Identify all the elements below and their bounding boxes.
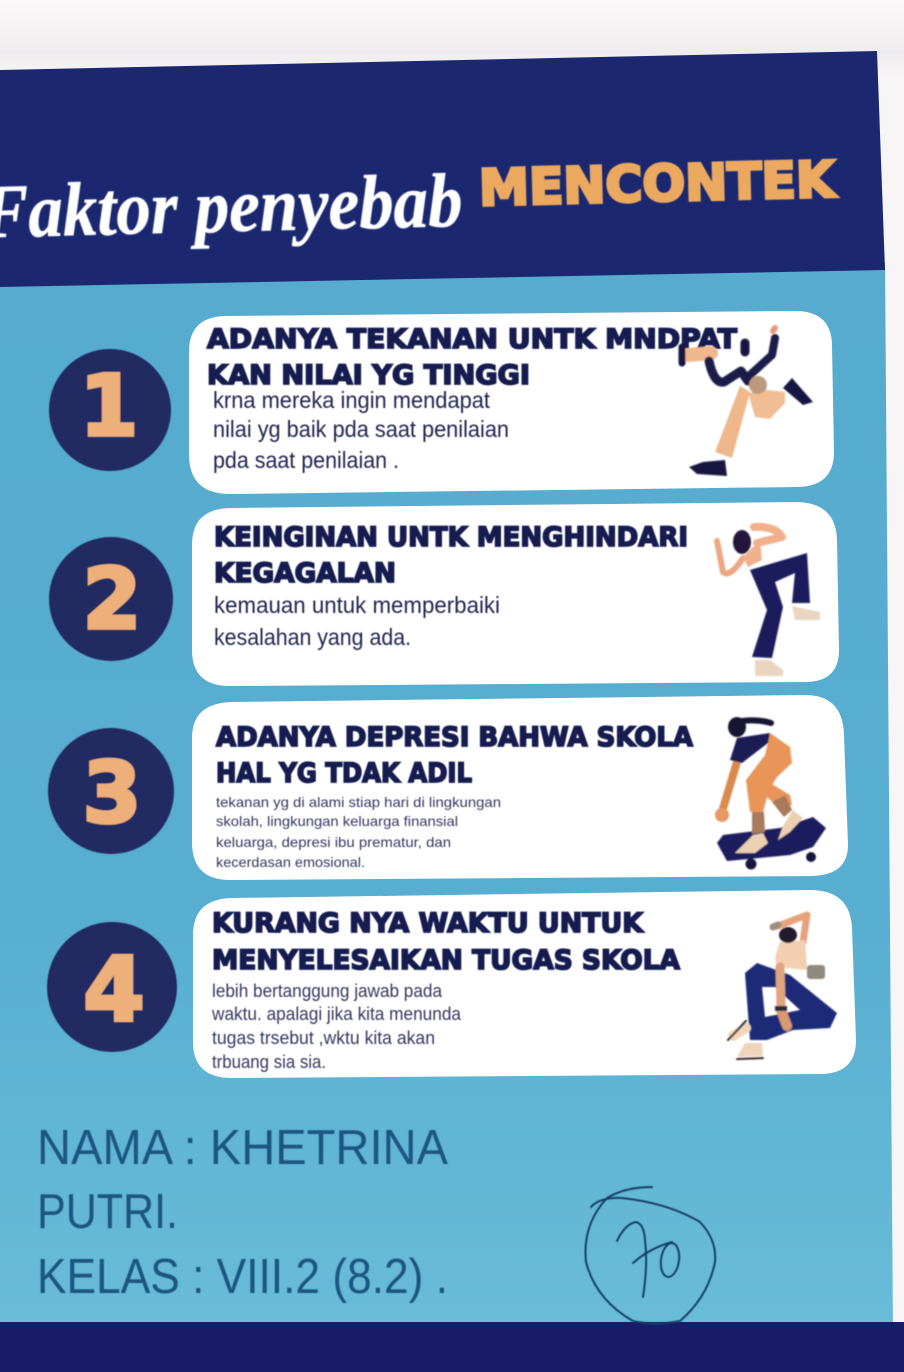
top navy banner [0, 51, 885, 287]
title highlight: MENCONTEK: MENCONTEK [478, 151, 838, 217]
title [0, 150, 838, 254]
icon: figure seated [728, 915, 837, 1059]
card 3 heading: ADANYA DEPRESI BAHWA SKOLA [216, 722, 693, 753]
panel: factor 3 [192, 695, 848, 880]
card 1 heading: ADANYA TEKANAN UNTK MNDPAT [207, 324, 738, 355]
card 3 background [192, 695, 848, 880]
card 4 body text [211, 981, 462, 1072]
card 1 body text [213, 387, 509, 473]
number badge 1 [49, 349, 171, 471]
number badge 4: 4 [83, 938, 145, 1041]
card 1 body text: krna mereka ingin mendapat [213, 387, 491, 413]
card 4 body text: waktu. apalagi jika kita menunda [211, 1004, 462, 1024]
card 4 heading: MENYELESAIKAN TUGAS SKOLA [212, 945, 680, 976]
number badge 2: 2 [83, 550, 141, 648]
card 3 body text: tekanan yg di alami stiap hari di lingkungan [216, 794, 501, 810]
card 2 background [192, 502, 839, 686]
card 4 body text: trbuang sia sia. [212, 1052, 326, 1072]
student name and class: PUTRI. [37, 1185, 178, 1239]
paper shading above banner [0, 0, 904, 75]
card 3 body text: skolah, lingkungan keluarga finansial [216, 813, 458, 829]
card 1 body text: pda saat penilaian . [213, 447, 399, 473]
card 2 heading: KEGAGALAN [214, 558, 396, 589]
panel: factor 4 [193, 890, 856, 1078]
number badge 2 [49, 537, 173, 661]
card 2 body text: kesalahan yang ada. [214, 624, 411, 650]
card 4 heading [212, 908, 680, 976]
card 4 body text: tugas trsebut ,wktu kita akan [212, 1028, 435, 1048]
card 3 heading: HAL YG TDAK ADIL [216, 758, 472, 789]
card 4 body text: lebih bertanggung jawab pada [212, 981, 443, 1001]
card 2 body text: kemauan untuk memperbaiki [214, 592, 500, 618]
card 2 body text [214, 592, 500, 650]
number badge 4 [47, 922, 177, 1052]
card 1 body text: nilai yg baik pda saat penilaian [213, 416, 509, 442]
panel: factor 1 [189, 311, 834, 494]
number badge 1: 1 [80, 357, 138, 455]
bottom navy band [0, 1322, 904, 1372]
card 2 heading: KEINGINAN UNTK MENGHINDARI [214, 522, 688, 553]
card 4 heading: KURANG NYA WAKTU UNTUK [212, 908, 644, 939]
card 2 heading [214, 522, 688, 589]
card 3 body text: kecerdasan emosional. [216, 854, 365, 870]
student name and class: NAMA : KHETRINA [37, 1121, 448, 1175]
student name and class [37, 1121, 448, 1304]
card 3 body text [216, 794, 501, 870]
icon: figure jumping [682, 328, 813, 476]
card 1 heading [207, 324, 738, 391]
number badge 3 [48, 728, 174, 854]
blue poster panel [0, 262, 893, 1330]
number badge 3: 3 [83, 744, 141, 842]
student name and class: KELAS : VIII.2 (8.2) . [37, 1250, 448, 1304]
card 3 heading [216, 722, 693, 789]
handwritten grade: 70 [585, 1187, 715, 1324]
icon: figure dancing [717, 527, 820, 676]
card 1 heading: KAN NILAI YG TINGGI [207, 360, 530, 391]
card 4 background [193, 890, 856, 1078]
panel: factor 2 [192, 502, 839, 686]
card 3 body text: keluarga, depresi ibu prematur, dan [216, 834, 451, 850]
card 1 background [189, 311, 834, 494]
icon: figure on skateboard [715, 717, 826, 870]
